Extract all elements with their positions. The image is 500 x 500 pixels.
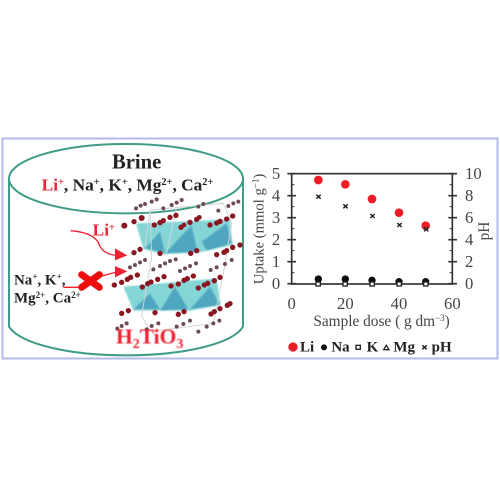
ion list: + [58,177,64,188]
label: rejected ions: , K [37,272,57,288]
left axis labels: 3 [272,208,280,227]
pH series [316,195,428,231]
label: rejected ions: , Ca [45,291,72,307]
right axis labels: 0 [465,274,473,293]
legend: Li [300,340,314,356]
ion list: , Na [64,175,94,194]
legend: Na [331,340,350,356]
panel: scatter chart [251,164,493,356]
label: rejected ions: 2+ [71,290,81,300]
left axis labels [272,164,281,293]
axis title: left: Uptake (mmol g [251,188,267,284]
plot axes and ticks [287,174,457,284]
label: rejected ions: Na [14,272,32,288]
x axis labels: 20 [337,294,354,313]
label: rejected ions [14,272,81,307]
label: H2TiO3: 3 [176,337,183,352]
ion list: + [94,177,100,188]
left axis labels: 5 [272,164,280,183]
right axis labels: 6 [465,208,473,227]
label: rejected ions: 2+ [36,290,45,300]
heading: Brine: Brine [112,151,161,173]
axis title: x: Sample dose ( g dm [313,313,435,330]
legend: pH [432,340,452,356]
right axis labels: 10 [465,164,482,183]
x axis labels: 40 [391,294,407,313]
legend: K [367,340,379,356]
left axis labels: 2 [272,230,280,249]
axis title: x: ) [445,313,450,330]
label: rejected ions: , [62,272,66,288]
outer frame [2,138,498,358]
label: rejected ions: + [57,272,62,282]
ion list: Li [42,175,58,194]
ion list: , Ca [172,175,203,194]
cylinder outline [9,144,243,355]
dark red atoms [112,213,243,317]
Li series [314,176,430,230]
lattice lines [142,203,232,332]
legend [288,340,452,356]
ion list: , K [100,175,122,194]
axis title: right: pH [476,222,493,240]
label: rejected ions: + [32,272,37,282]
axis title: left: ) [251,174,267,179]
label: rejected ions: Mg [14,291,36,307]
legend: Mg [393,340,415,356]
Na, K, Mg series [315,275,429,286]
ion list: 2+ [202,177,213,188]
label: Li+ arrow: + [109,222,115,233]
grey atom rows [115,197,240,334]
ion list: + [122,177,128,188]
right axis labels: 4 [465,230,474,249]
axis title: x: −3 [435,313,445,323]
right axis labels: 2 [465,252,473,271]
ion list: 2+ [161,177,173,188]
label: Li+ arrow: Li [93,221,109,240]
label: H2TiO3: TiO [140,324,176,348]
blocked arrow with red cross [63,266,127,287]
ion list: , Mg [128,175,162,194]
label: H2TiO3: H [116,324,133,348]
panel: brine cylinder [9,144,243,355]
x axis labels: 60 [444,294,461,313]
right axis labels [465,164,482,293]
x axis labels [288,294,461,313]
left axis labels: 4 [272,186,281,205]
x axis labels: 0 [288,294,296,313]
octahedra layers [123,219,233,311]
label: Li+ arrow [71,221,127,260]
left axis labels: 0 [272,274,280,293]
crystal structure [112,197,243,334]
axis title: left: −1 [251,179,261,188]
right axis labels: 8 [465,186,473,205]
left axis labels: 1 [272,252,280,271]
label: H2TiO3: 2 [133,337,140,352]
